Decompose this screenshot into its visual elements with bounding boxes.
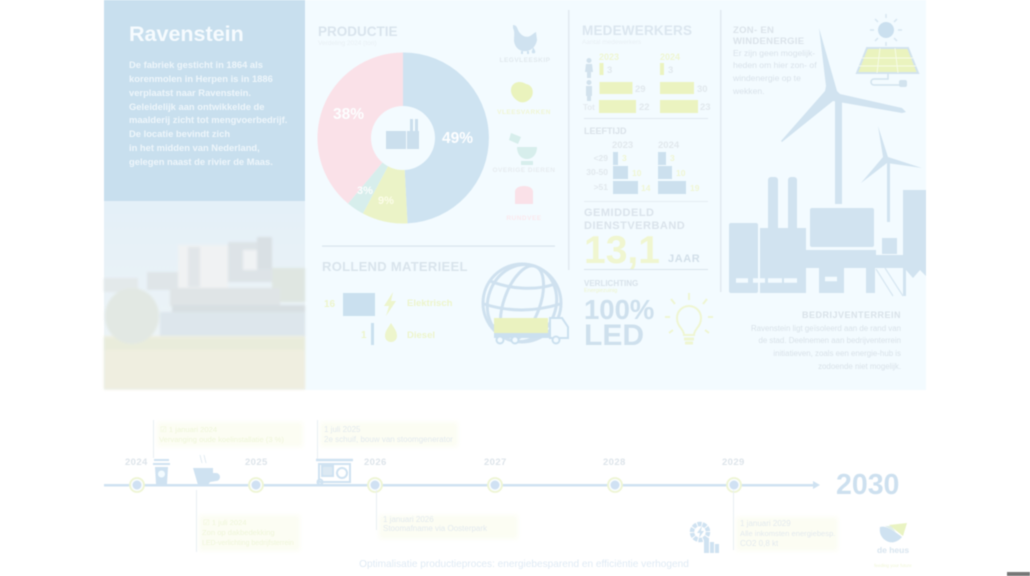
section: rollend materieel: 1 — [361, 330, 367, 341]
callout: juli 2024: Zon op dakbedekking — [202, 528, 275, 537]
section: verlichting: Energiezuinig — [584, 288, 617, 294]
callout: juli 2024: LED-verlichting bedrijfsterrein — [202, 540, 294, 547]
section: medewerkers: 3 — [668, 65, 673, 76]
section: medewerkers — [582, 23, 711, 113]
timeline: 2025 — [245, 457, 268, 468]
panel: intro: gelegen naast de rivier de Maas. — [129, 156, 273, 167]
factory — [768, 177, 778, 237]
timeline nodes — [130, 478, 741, 492]
heading: productie: PRODUCTIE — [318, 24, 398, 39]
timeline: 2027 — [484, 457, 507, 468]
section: medewerkers: Aantal medewerkers — [582, 39, 642, 46]
section: rollend materieel — [322, 259, 468, 345]
section: bedrijventerrein: Ravenstein ligt geïsoleerd aan de rand van — [751, 324, 901, 333]
panel: intro: Ravenstein — [129, 22, 244, 46]
timeline: 2024 — [125, 457, 148, 468]
pie chart: production share: 38% — [333, 106, 364, 123]
section: medewerkers: Tot — [583, 103, 595, 112]
timeline: 2029 — [722, 457, 745, 468]
callout: juli 2024: ☑ 1 juli 2024 — [203, 518, 247, 527]
panel: intro: De fabriek gesticht in 1864 als — [129, 59, 263, 70]
callout: juli 2025 — [317, 420, 458, 460]
section: zon- en windenergie text: wekken. — [732, 86, 765, 96]
callout: januari 2029: Alle inkomsten energiebesp. — [740, 529, 835, 538]
icon: man — [586, 80, 592, 101]
section: leeftijd: 14 — [641, 183, 651, 193]
section: zon- en windenergie text: ZON- EN — [733, 25, 774, 36]
timeline — [104, 457, 899, 501]
icon: hen — [513, 25, 537, 51]
section: leeftijd: 3 — [622, 153, 627, 163]
callout: juli 2025: 1 juli 2025 — [324, 425, 361, 434]
icon: machine — [316, 460, 353, 484]
timeline: 2030 — [836, 469, 899, 501]
callout: januari 2024 — [153, 420, 303, 458]
logo: de heus: feeding your future — [874, 563, 912, 568]
callout: januari 2026: 1 januari 2026 — [383, 515, 434, 524]
panel: intro: korenmolen in Herpen is in 1886 — [129, 73, 273, 84]
timeline: 2026 — [364, 457, 387, 468]
panel: intro: Geleidelijk aan ontwikkelde de — [129, 101, 264, 112]
section: medewerkers: 2023 — [599, 52, 619, 62]
section: leeftijd: 19 — [690, 183, 700, 193]
section: zon- en windenergie text: Er zijn geen mogelijk- — [733, 48, 815, 58]
section: gemiddeld dienstverband: JAAR — [668, 253, 700, 265]
section: rollend materieel: ROLLEND MATERIEEL — [322, 259, 468, 274]
section: gemiddeld dienstverband — [584, 207, 700, 272]
section: leeftijd: 2024 — [658, 140, 680, 151]
section: gemiddeld dienstverband: 13,1 — [584, 229, 660, 272]
photo: factory by the river — [104, 201, 305, 390]
icon: fuel drop — [385, 323, 397, 342]
section: leeftijd: LEEFTIJD — [584, 126, 627, 136]
callout: januari 2029 — [733, 490, 838, 551]
section: zon- en windenergie text: windenergie op te — [732, 73, 801, 83]
icon: light bulb — [665, 293, 713, 343]
section: medewerkers: 3 — [607, 65, 612, 76]
heading: productie: Verdeling 2024 (ton) — [318, 40, 377, 47]
wind turbine small — [861, 126, 922, 183]
section: leeftijd: 2023 — [612, 140, 633, 151]
callout: januari 2024: Vervanging oude koelinstallatie (3 %) — [159, 435, 284, 444]
corner bar — [1007, 572, 1030, 576]
section: verlichting: VERLICHTING — [584, 279, 638, 288]
panel: intro: De locatie bevindt zich — [129, 128, 230, 139]
callout: januari 2024: ☑ 1 januari 2024 — [160, 425, 217, 434]
pie chart: production share: 9% — [378, 195, 394, 207]
section: leeftijd: 30-50 — [586, 167, 608, 177]
callout: januari 2029: CO2 0,8 kt — [740, 539, 779, 548]
text: optimisation goal: Optimalisatie productieproces: energiebesparend en efficiëntie verhogend — [359, 559, 689, 570]
section: rollend materieel: 16 — [324, 299, 336, 310]
section: medewerkers: 23 — [700, 102, 711, 113]
icon group: product categories: LEGVLEESKIP — [499, 57, 551, 64]
icon: factory — [386, 119, 419, 149]
icon: globe with truck — [477, 255, 568, 351]
pie chart: production share: 49% — [442, 130, 473, 147]
section: verlichting: LED — [584, 319, 644, 352]
section: bedrijventerrein: initiatieven, zoals een energie-hub is — [773, 349, 901, 358]
icon: yellow blob — [511, 82, 533, 102]
callout: juli 2025: 2e schuif, bouw van stoomgenerator — [324, 435, 453, 444]
section: leeftijd: <29 — [594, 153, 608, 163]
section: bedrijventerrein — [751, 310, 901, 371]
section: verlichting: 100% — [584, 294, 654, 325]
section: zon- en windenergie text — [732, 25, 817, 96]
logo: de heus — [874, 523, 912, 568]
icon group: product categories: VLEESVARKEN — [497, 109, 551, 116]
panel: intro: in het midden van Nederland, — [129, 142, 260, 153]
section: bedrijventerrein: zodoende niet mogelijk. — [818, 362, 901, 371]
section: gemiddeld dienstverband: DIENSTVERBAND — [584, 220, 685, 232]
icon: coffee cup — [193, 455, 220, 485]
icon: wind turbines and factory skyline — [729, 28, 926, 296]
section: leeftijd: >51 — [594, 182, 608, 192]
wind turbine large — [781, 28, 906, 142]
divider lines — [322, 10, 722, 292]
section: bedrijventerrein: de stad. Deelnemen aan bedrijventerrein — [758, 336, 901, 345]
icon: to-go cup — [153, 459, 170, 484]
icon group: product categories — [493, 25, 555, 222]
callout: januari 2029: 1 januari 2029 — [740, 519, 791, 528]
section: medewerkers: 29 — [635, 84, 646, 95]
pie chart: production share: 3% — [357, 185, 373, 197]
callout: januari 2026: Stoomafname via Oosterpark — [383, 524, 488, 533]
section: verlichting — [584, 279, 713, 352]
panel: main background — [305, 0, 926, 390]
panel: intro: verplaatst naar Ravenstein. — [129, 87, 251, 98]
icon: sun and solar panel — [857, 14, 918, 87]
icon group: product categories: OVERIGE DIEREN — [493, 167, 555, 174]
section: leeftijd — [584, 126, 700, 194]
section: rollend materieel: Diesel — [407, 330, 435, 341]
icon: woman — [585, 58, 593, 78]
section: gemiddeld dienstverband: GEMIDDELD — [584, 207, 654, 219]
icon: gear with bars — [692, 524, 719, 553]
callout: juli 2024 — [196, 490, 300, 552]
panel: intro: maalderij zicht tot mengvoerbedrijf. — [129, 114, 287, 125]
section: medewerkers: 22 — [639, 102, 650, 113]
heading: productie — [318, 24, 398, 47]
timeline: 2028 — [603, 457, 626, 468]
section: medewerkers: MEDEWERKERS — [582, 23, 692, 38]
section: medewerkers: 30 — [697, 84, 708, 95]
section: zon- en windenergie text: heden om hier zon- of — [733, 60, 817, 70]
panel: intro — [104, 0, 305, 201]
section: leeftijd: 3 — [670, 153, 675, 163]
callout: januari 2026 — [376, 490, 518, 539]
section: zon- en windenergie text: WINDENERGIE — [733, 36, 804, 47]
section: rollend materieel: Elektrisch — [407, 298, 453, 309]
section: leeftijd: 10 — [632, 168, 642, 178]
icon: bolt — [384, 292, 396, 316]
pie chart: production share — [317, 52, 489, 224]
section: medewerkers: 2024 — [660, 52, 680, 62]
icon group: product categories: RUNDVEE — [506, 215, 542, 222]
section: leeftijd: 10 — [676, 168, 686, 178]
icon: pink bag — [515, 186, 533, 204]
section: bedrijventerrein: BEDRIJVENTERREIN — [802, 310, 901, 320]
icon: mixing bowl — [509, 133, 537, 165]
logo: de heus: de heus — [877, 545, 909, 555]
